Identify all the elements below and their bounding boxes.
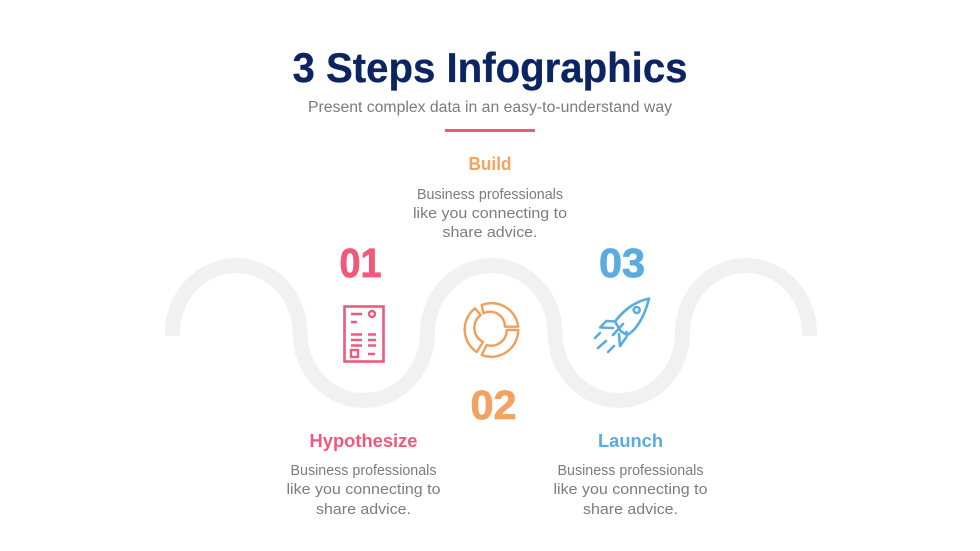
subtitle: Present complex data in an easy-to-understand way	[308, 99, 672, 116]
text: Build description	[413, 186, 567, 241]
text: Launch description: like you connecting to	[554, 481, 708, 498]
title: 3 Steps Infographics	[292, 44, 688, 91]
heading: Launch: Launch	[598, 430, 663, 451]
step: Build	[413, 153, 567, 241]
icon: document	[344, 306, 384, 362]
text: Build description: like you connecting to	[413, 205, 567, 222]
step: Launch	[554, 430, 708, 518]
text: Build description: Business professionals	[417, 186, 563, 203]
number 02: 02	[470, 382, 516, 428]
text: Hypothesize description: Business professionals	[290, 462, 436, 479]
number 03: 03	[599, 240, 645, 286]
step: Hypothesize	[286, 430, 440, 518]
number 01: 01	[340, 240, 382, 286]
text: Launch description	[554, 462, 708, 518]
wave path	[172, 266, 810, 400]
text: Launch description: share advice.	[583, 501, 678, 518]
heading: Hypothesize: Hypothesize	[310, 430, 418, 451]
text: Hypothesize description: share advice.	[316, 501, 411, 518]
heading: Build: Build	[468, 153, 512, 174]
text: Build description: share advice.	[442, 224, 538, 241]
icon: rocket	[595, 298, 649, 352]
text: Hypothesize description: like you connecting to	[286, 481, 440, 498]
icon: donut chart	[465, 303, 518, 357]
title underline	[445, 129, 535, 132]
text: Launch description: Business professionals	[558, 462, 704, 479]
text: Hypothesize description	[286, 462, 440, 518]
